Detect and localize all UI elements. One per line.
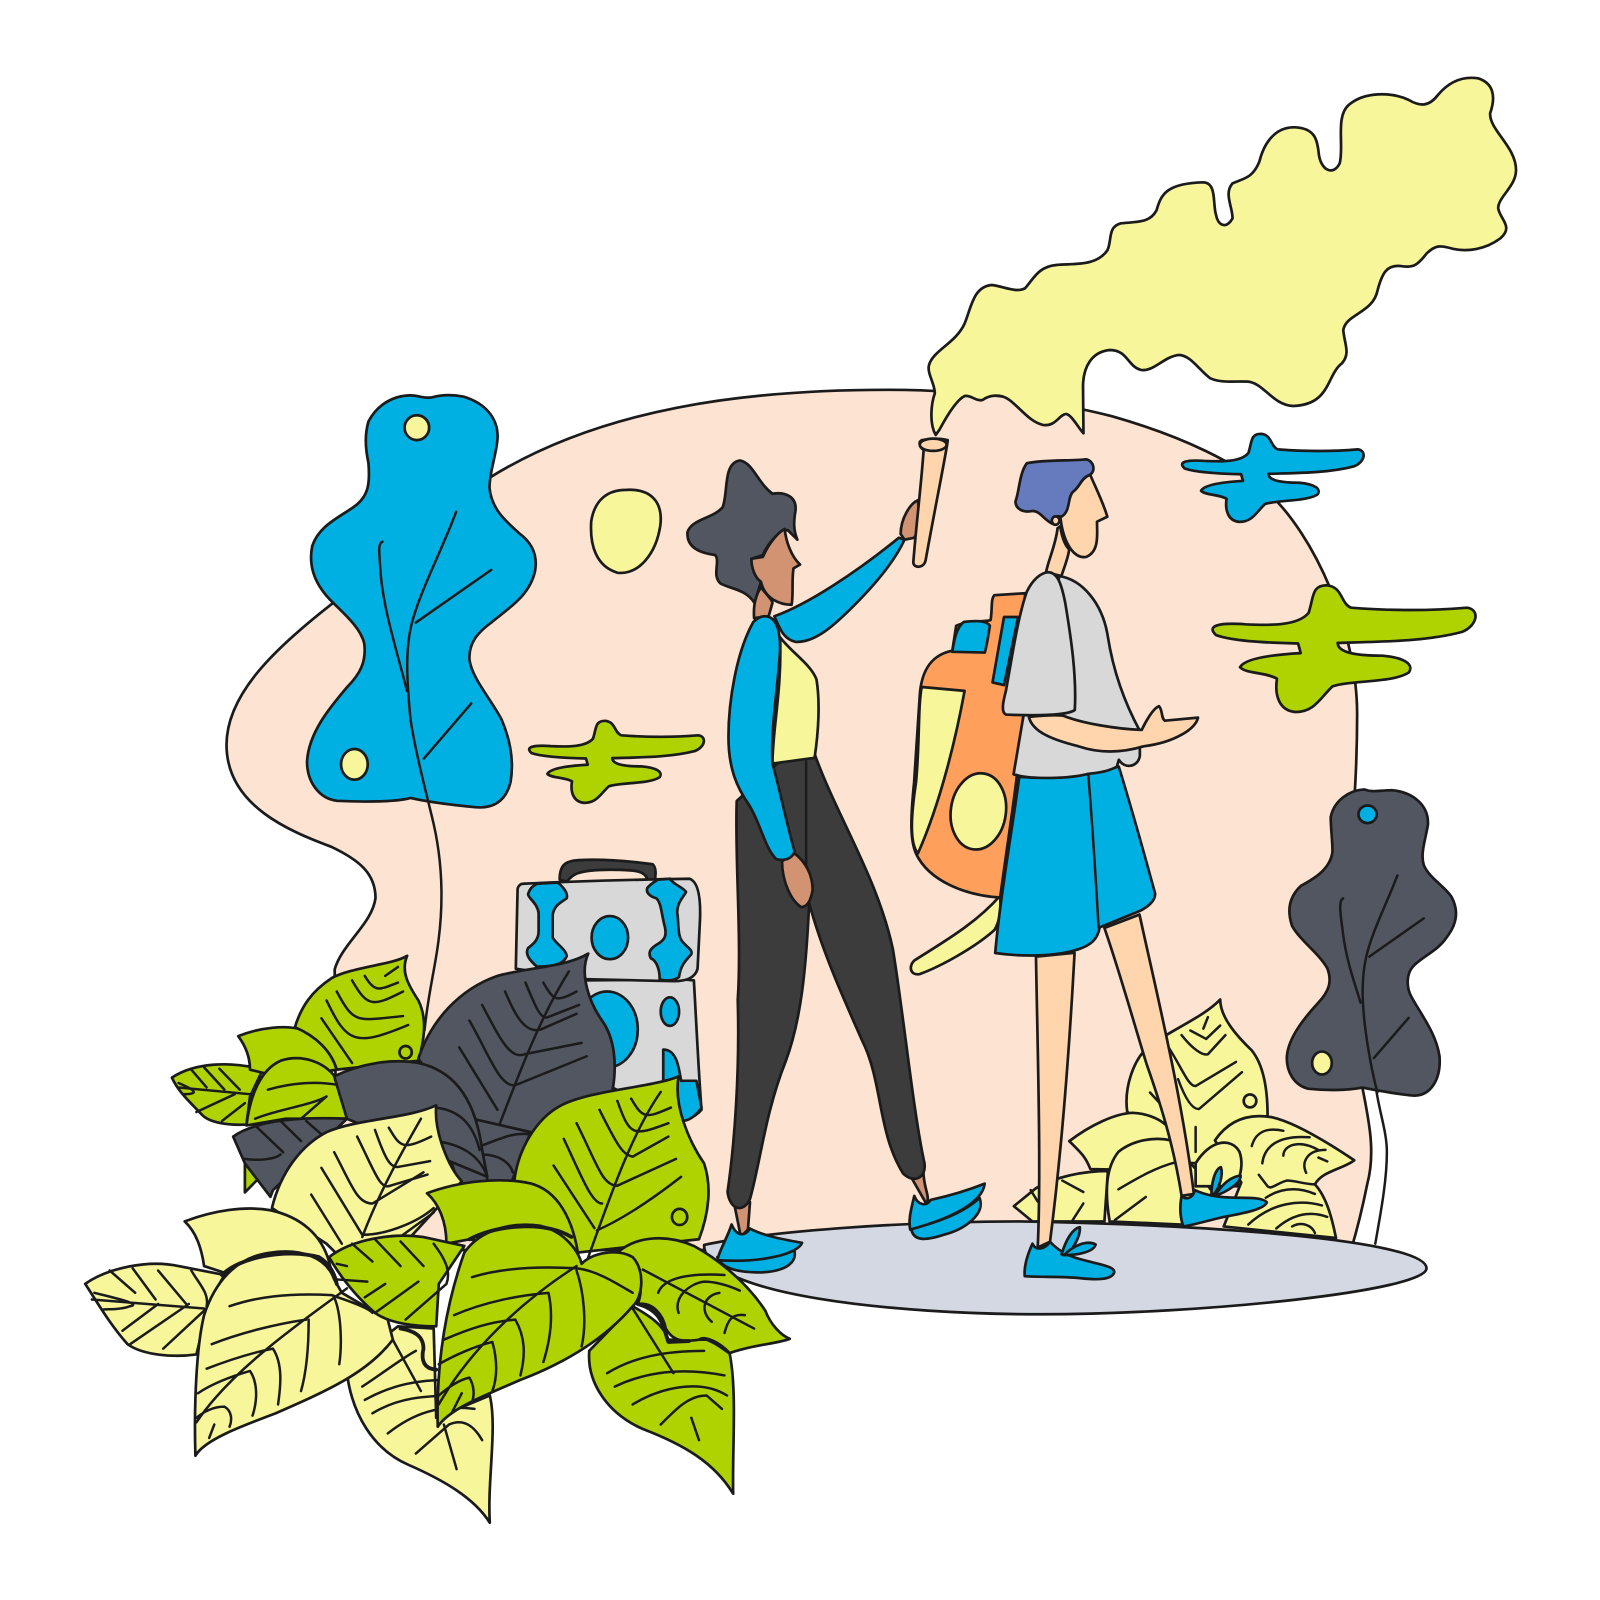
person with backpack — [911, 459, 1267, 1279]
shirt and arm — [1014, 576, 1140, 778]
suitcase upper body — [516, 860, 700, 981]
pale leaves — [185, 1209, 337, 1293]
large green leaf — [514, 1076, 709, 1253]
green leaves — [427, 1180, 579, 1262]
neck and head — [1046, 526, 1069, 576]
backpack — [911, 896, 1000, 974]
shoe uppers — [717, 1224, 802, 1261]
blue cloud — [1182, 434, 1364, 522]
upper body, head and torch — [687, 439, 948, 907]
large dark leaf — [418, 954, 615, 1177]
hair and face — [687, 460, 797, 603]
dark tree — [1287, 789, 1456, 1244]
person with torch — [687, 439, 985, 1272]
tail of green leaf — [245, 1159, 260, 1192]
dark lower leaves — [434, 1110, 531, 1186]
far left green leaf — [172, 1064, 263, 1125]
blue tree fruits — [405, 415, 429, 440]
dark tree stem — [1375, 1091, 1387, 1244]
large pale leaf — [272, 1105, 462, 1284]
small green cloud — [529, 721, 704, 803]
dark tree fruits — [1358, 805, 1377, 823]
ground ellipse — [704, 1221, 1427, 1314]
pale yellow moon — [591, 490, 661, 573]
shoe soles — [717, 1249, 795, 1272]
background pale leaves — [1014, 1000, 1354, 1238]
peach background blob — [227, 390, 1371, 1250]
pants and feet — [717, 753, 985, 1272]
suitcase lower body — [577, 979, 702, 1121]
blue tree crown — [307, 395, 536, 807]
torch — [913, 439, 948, 567]
foreground leaf cluster — [85, 954, 790, 1523]
legs and shoes — [1025, 915, 1267, 1279]
suitcase — [516, 860, 702, 1121]
skirt — [995, 767, 1155, 956]
dark tree crown — [1287, 789, 1456, 1096]
blue tree — [307, 395, 536, 1030]
smoke cloud — [929, 78, 1516, 435]
back green leaves — [238, 1027, 337, 1079]
large green cloud — [1213, 585, 1476, 712]
